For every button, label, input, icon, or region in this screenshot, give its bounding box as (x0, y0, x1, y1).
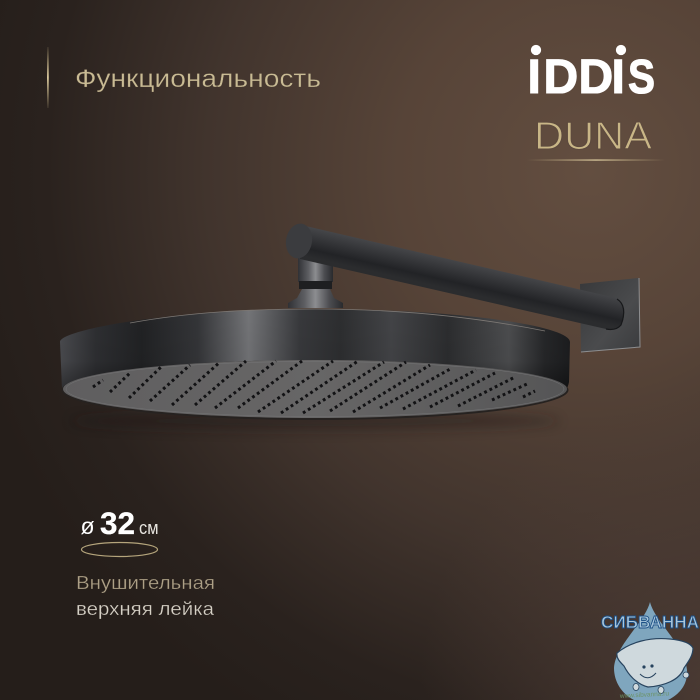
caption: верхняя лейка (76, 598, 215, 619)
shower arm assembly (283, 222, 640, 352)
spray nozzles (93, 361, 535, 413)
diameter label: ø (80, 513, 95, 539)
series name: DUNA (534, 115, 652, 158)
swivel joint (288, 248, 343, 308)
tub face (640, 664, 656, 678)
arm end cap (283, 222, 315, 260)
brand logo: I (528, 51, 541, 104)
accent line (47, 47, 49, 108)
drop (614, 602, 687, 700)
brand logo: S (628, 51, 655, 104)
brand logo: D (578, 51, 613, 104)
heading: Функциональность (75, 65, 321, 93)
head spray face (62, 360, 568, 420)
arm wall ring (606, 299, 624, 330)
shadow (70, 412, 560, 430)
diameter label (80, 505, 158, 541)
bathtub (617, 639, 693, 687)
shower head (60, 309, 570, 430)
tub feet (633, 672, 689, 694)
diameter ellipse icon (82, 542, 158, 556)
arm tube (297, 224, 624, 329)
diameter label: см (139, 518, 158, 538)
head side wall (60, 309, 570, 396)
brand logo: D (544, 51, 578, 104)
wall plate (580, 278, 640, 352)
diameter label: 32 (100, 505, 135, 541)
watermark logo (601, 602, 699, 700)
watermark url: www.sibvanna.ru (619, 690, 670, 700)
brand logo: I (612, 51, 625, 104)
brand logo (528, 45, 655, 104)
watermark name: СИБВАННА (601, 612, 699, 632)
caption: Внушительная (76, 572, 215, 593)
series underline (527, 159, 665, 161)
caption (76, 572, 215, 619)
